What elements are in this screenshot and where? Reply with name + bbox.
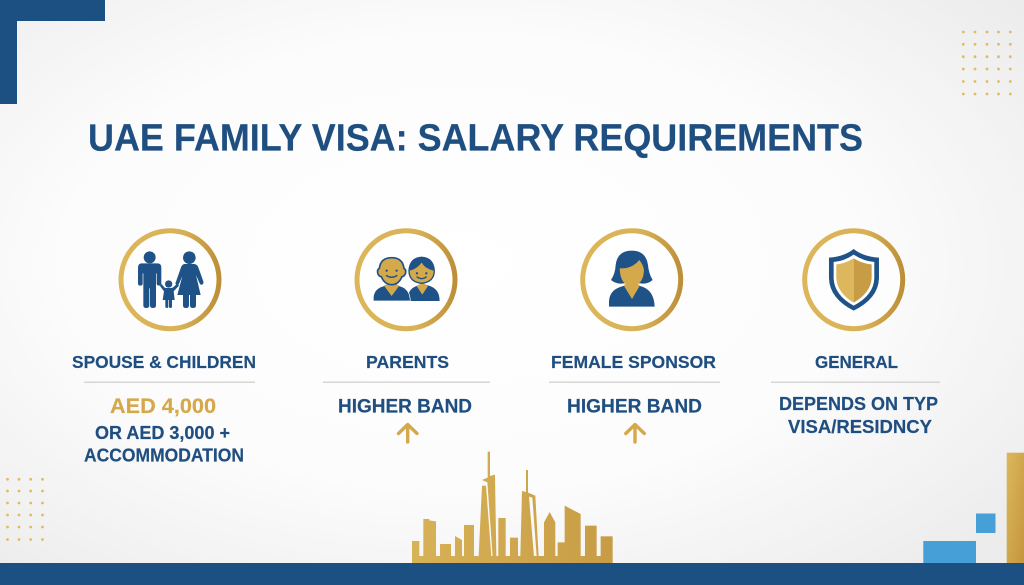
note: or AED 3,000 plus accommodation [84,423,244,466]
note: or AED 3,000 plus accommodation: ACCOMMODATION [84,446,244,466]
arrow: up [626,424,644,442]
note: depends on type [779,394,938,437]
decorative blocks bottom right [923,453,1024,564]
corner bracket top left [0,0,105,104]
title: UAE FAMILY VISA: SALARY REQUIREMENTS [88,118,863,160]
skyline [412,452,613,563]
label: general: GENERAL [815,352,898,372]
dot grid top right [962,31,1012,95]
panel: female sponsor [549,231,720,442]
value: higher band: HIGHER BAND [567,396,702,418]
icon: parents [357,231,455,329]
label: parents: PARENTS [366,352,449,372]
icon: woman [583,231,681,329]
label: spouse and children: SPOUSE & CHILDREN [72,352,256,372]
value: higher band: HIGHER BAND [338,396,472,418]
icon: family [121,231,219,329]
arrow: up [398,424,417,442]
label: female sponsor: FEMALE SPONSOR [551,352,716,372]
dot grid bottom left [6,478,44,541]
note: depends on type: DEPENDS ON TYP [779,394,938,414]
icon: shield [805,231,903,329]
panel: spouse and children [72,231,256,466]
note: depends on type: VISA/RESIDNCY [788,417,932,437]
panel: general [771,231,940,437]
note: or AED 3,000 plus accommodation: OR AED 3,000 + [95,423,230,443]
value: AED 4,000: AED 4,000 [110,395,216,418]
panel: parents [323,231,490,442]
footer bar [0,563,1024,585]
